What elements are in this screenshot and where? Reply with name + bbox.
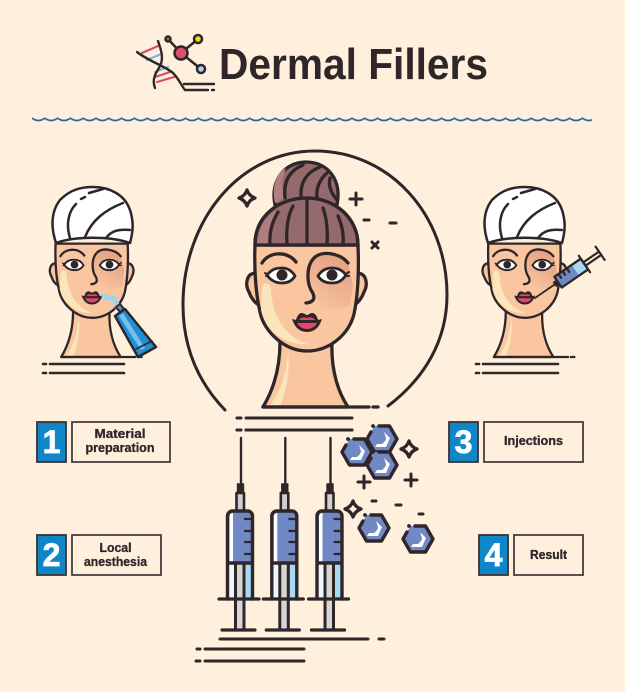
number badge 2: 2 — [43, 537, 60, 573]
sparkle — [239, 190, 255, 206]
white turban — [53, 187, 133, 243]
panel: syringes and filler molecules — [196, 424, 433, 661]
white turban — [485, 187, 565, 243]
panel: central face illustration — [183, 151, 447, 430]
icon: hexagon cluster — [342, 424, 397, 478]
icon: DNA strands — [137, 41, 214, 90]
step 1 — [37, 422, 170, 462]
face — [483, 244, 574, 357]
sparkle lower — [345, 501, 361, 517]
icon: molecule — [166, 35, 205, 73]
label: material preparation: preparation — [86, 441, 154, 455]
face — [50, 244, 142, 357]
sparkle upper — [401, 441, 417, 457]
step 4 — [479, 535, 583, 575]
icon: hexagon left — [359, 513, 389, 541]
icon: syringe 1 — [219, 438, 259, 630]
label: local anesthesia — [72, 535, 161, 575]
plus and minus marks — [350, 193, 396, 248]
face and neck — [247, 245, 378, 407]
label: injections: Injections — [504, 434, 563, 448]
hair bun — [274, 162, 338, 205]
label: local anesthesia: anesthesia — [84, 555, 148, 569]
number badge 3: 3 — [455, 424, 472, 460]
caption lines — [43, 364, 124, 373]
wave divider — [32, 116, 592, 124]
arch outline — [183, 151, 447, 410]
caption lines — [237, 418, 352, 430]
title: Dermal Fillers — [219, 40, 488, 89]
number badge 4: 4 — [485, 537, 503, 573]
label: material preparation — [72, 422, 170, 462]
icon: DNA rungs — [142, 46, 174, 82]
icon: syringe 2 — [263, 438, 303, 630]
icon: injecting syringe — [529, 245, 606, 306]
step 2 — [37, 535, 161, 575]
icon: filler tube — [104, 296, 156, 357]
plus and minus marks — [358, 474, 423, 514]
base lines — [196, 639, 384, 661]
hair fringe — [255, 198, 358, 245]
top line — [237, 428, 352, 432]
step 3 — [449, 422, 583, 462]
label: result: Result — [530, 548, 568, 562]
number badge 1: 1 — [43, 424, 60, 460]
caption lines — [476, 364, 558, 373]
icon: hexagon right — [403, 524, 433, 552]
panel: right head with syringe — [476, 187, 606, 373]
icon: syringe 3 — [308, 438, 348, 630]
icon: DNA and molecule logo — [137, 35, 214, 90]
panel: left head with tube — [43, 187, 156, 373]
label: material preparation: Material — [94, 427, 146, 441]
label: local anesthesia: Local — [100, 541, 132, 555]
